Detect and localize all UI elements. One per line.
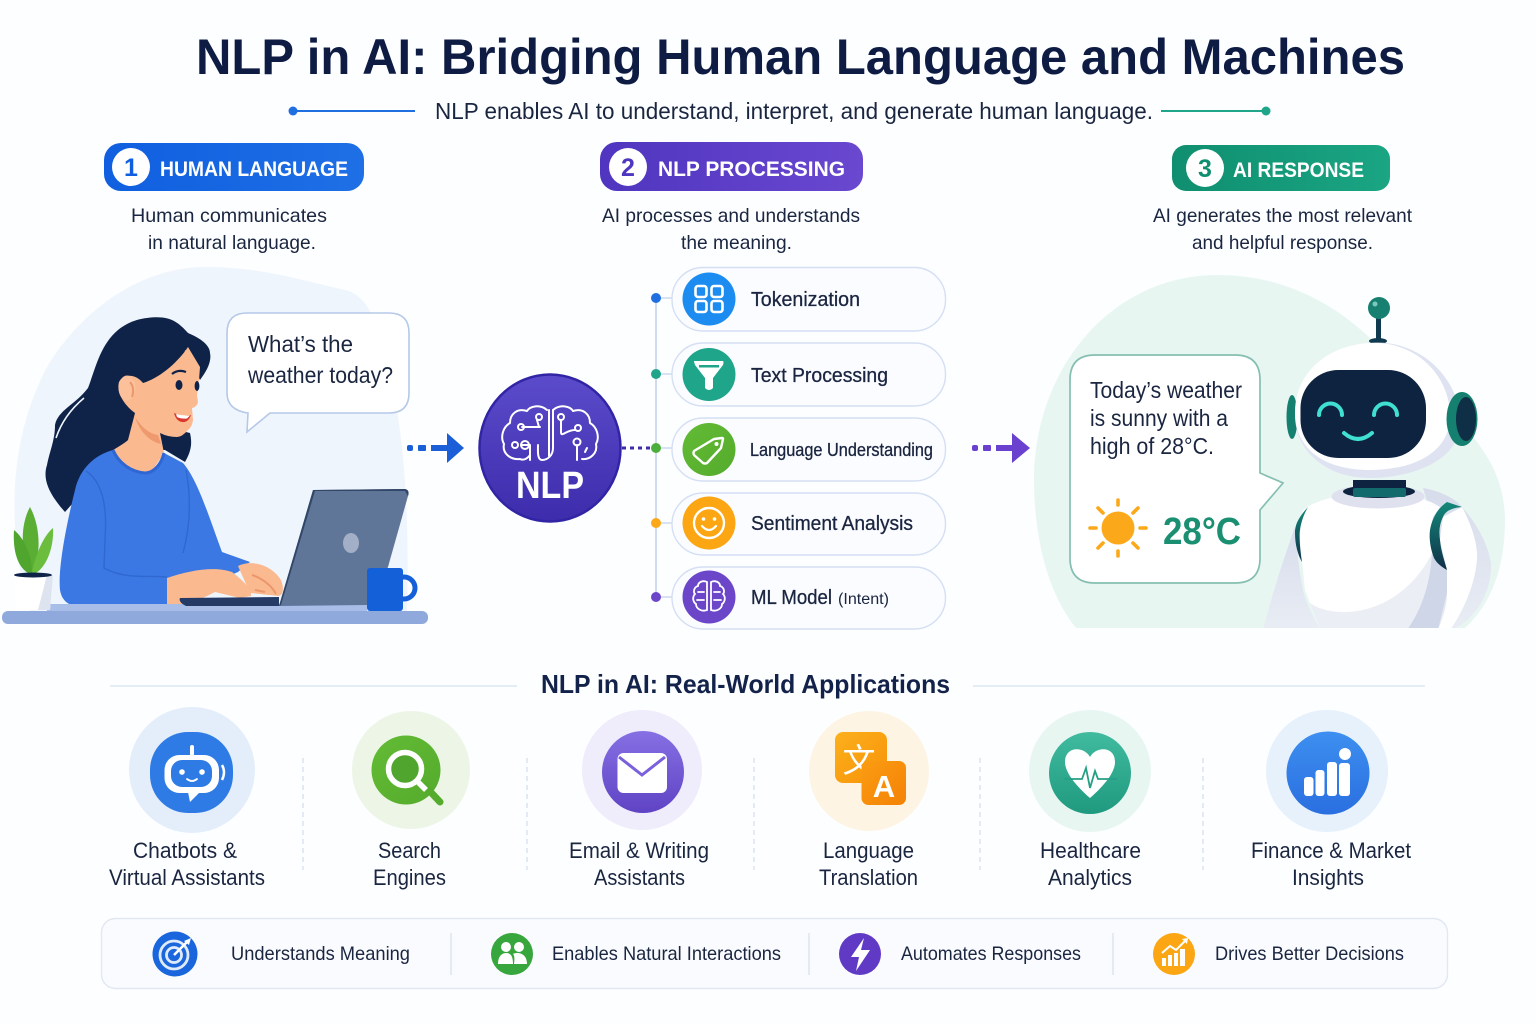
application: email and writing: Email & Writing (569, 838, 709, 863)
panel: step 3 AI response (1034, 145, 1505, 632)
application: search engines (352, 711, 470, 890)
icon: sun (1090, 500, 1146, 556)
connector: NLP to steps (622, 293, 672, 602)
application: finance and market (1251, 710, 1411, 890)
face and neck (113, 347, 200, 474)
hands (167, 569, 251, 607)
illustration: woman at laptop (2, 267, 428, 624)
step: ML model: ML Model (751, 587, 832, 609)
speech bubble: answer: high of 28°C. (1090, 433, 1214, 459)
application: healthcare analytics: Analytics (1048, 865, 1132, 890)
application: healthcare analytics: Healthcare (1040, 838, 1141, 863)
step 1 description: in natural language. (148, 232, 316, 254)
benefit: understands meaning: Understands Meaning (231, 943, 410, 965)
right arm (1438, 507, 1477, 630)
step: language understanding (672, 418, 946, 481)
right arm outer shadow (1423, 488, 1491, 632)
badge: step 3: 3 (1198, 155, 1212, 183)
left ear (1286, 395, 1298, 439)
hair (46, 317, 210, 512)
step: sentiment analysis: Sentiment Analysis (751, 513, 913, 535)
benefit: automates responses (839, 933, 1081, 975)
badge: step 1: HUMAN LANGUAGE (160, 158, 348, 181)
benefit: automates responses: Automates Responses (901, 943, 1081, 965)
antenna (1376, 318, 1381, 338)
step 3 description (1153, 205, 1413, 254)
face screen (1300, 370, 1426, 458)
benefit: natural interactions: Enables Natural Interactions (552, 943, 781, 965)
step: tokenization: Tokenization (751, 289, 860, 311)
step: ML model: (Intent) (838, 591, 889, 608)
application: healthcare analytics (1029, 710, 1151, 890)
application: language translation: A (873, 769, 895, 804)
application: search engines: Engines (373, 865, 446, 890)
speech bubble: answer: Today’s weather (1090, 377, 1242, 403)
panel: step 1 human language (2, 143, 428, 624)
application: email and writing (569, 710, 709, 890)
speech bubble: question: What’s the (248, 331, 353, 357)
section heading: applications: NLP in AI: Real-World Applications (541, 669, 950, 699)
step 2 description: AI processes and understands (602, 205, 860, 227)
application: finance and market: Insights (1292, 865, 1364, 890)
arrow: NLP to response (972, 433, 1030, 463)
panel: step 2 NLP processing (480, 142, 946, 629)
application: language translation: 文 (842, 742, 876, 779)
speech bubble: answer: 28°C (1163, 511, 1241, 553)
benefit: better decisions (1153, 933, 1404, 975)
badge: step 3 (1172, 145, 1390, 191)
step 2 description (602, 205, 860, 254)
sweater (60, 450, 250, 607)
step: sentiment analysis (672, 493, 946, 555)
subtitle with accent lines: NLP enables AI to understand, interpret, and generate human language. (435, 98, 1153, 124)
shoulder accents (1295, 507, 1308, 562)
application: finance and market: Finance & Market (1251, 838, 1411, 863)
plant (23, 507, 39, 573)
benefit: understands meaning (152, 932, 410, 976)
speech bubble: question: weather today? (247, 362, 393, 388)
step 1 description (131, 205, 327, 254)
application: language translation: Translation (819, 865, 918, 890)
step 2 description: the meaning. (681, 232, 792, 254)
step: tokenization (672, 268, 946, 331)
neck (1332, 484, 1424, 508)
desk (47, 604, 367, 614)
step 3 description: AI generates the most relevant (1153, 205, 1413, 227)
step: text processing: Text Processing (751, 365, 888, 387)
body (1300, 498, 1440, 612)
application: language translation (809, 711, 929, 890)
benefit: natural interactions (491, 933, 781, 975)
speech bubble: question (227, 313, 409, 432)
badge: step 2 (600, 142, 863, 191)
left arm (1263, 527, 1320, 630)
badge: step 2: 2 (621, 154, 635, 182)
speech bubble: answer (1070, 355, 1283, 583)
illustration: robot (1034, 275, 1505, 632)
application: chatbots (109, 707, 265, 890)
title: NLP in AI: Bridging Human Language and Machines (196, 29, 1405, 85)
icon: NLP brain circle: NLP (516, 465, 584, 507)
step: text processing (672, 343, 946, 406)
benefit: better decisions: Drives Better Decisions (1215, 943, 1404, 965)
application: language translation: Language (823, 838, 914, 863)
badge: step 1: 1 (124, 154, 138, 182)
badge: step 3: AI RESPONSE (1233, 159, 1364, 182)
application: email and writing: Assistants (594, 865, 685, 890)
laptop (180, 597, 279, 606)
speech bubble: answer: is sunny with a (1090, 405, 1228, 431)
application: chatbots: Chatbots & (133, 838, 237, 863)
step 3 description: and helpful response. (1192, 232, 1373, 254)
icon: NLP brain circle (480, 374, 620, 522)
application: chatbots: Virtual Assistants (109, 865, 265, 890)
mug (393, 577, 415, 599)
arrow: human to NLP (407, 433, 464, 463)
head (1295, 343, 1460, 478)
panel: benefits bar (102, 918, 1448, 988)
step: ML model (672, 567, 946, 629)
badge: step 1 (104, 143, 364, 191)
step 1 description: Human communicates (131, 205, 327, 227)
step: language understanding: Language Understanding (750, 440, 933, 460)
application: search engines: Search (378, 838, 441, 863)
badge: step 2: NLP PROCESSING (658, 158, 845, 181)
